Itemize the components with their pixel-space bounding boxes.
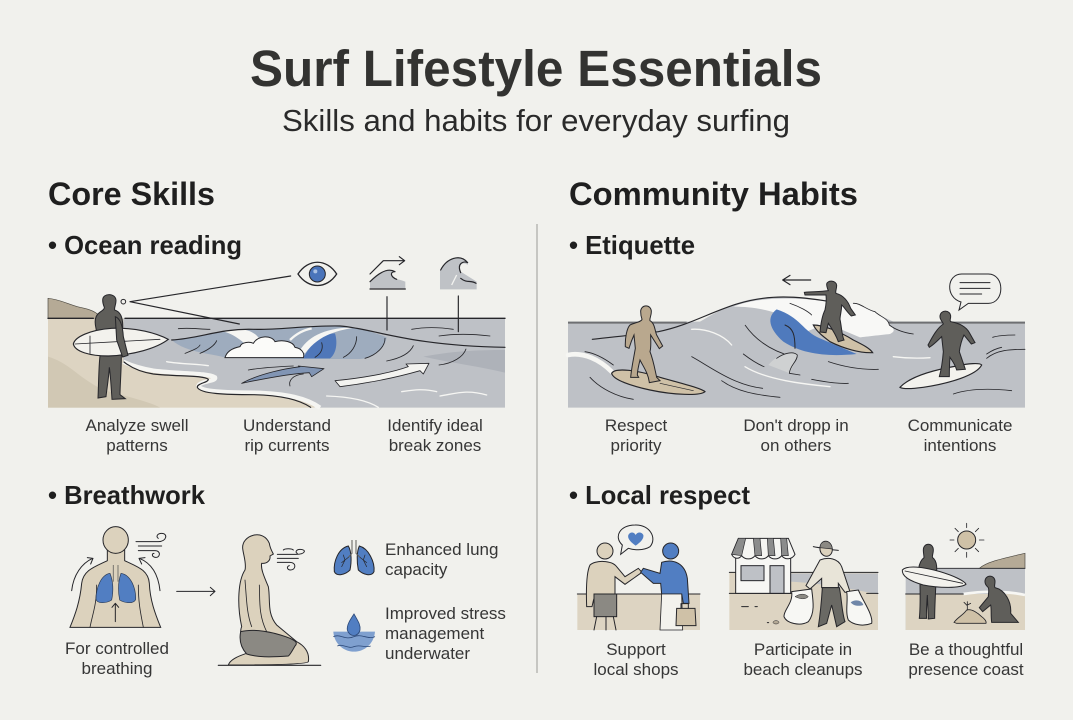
heading: ocean reading: • Ocean reading <box>48 230 242 260</box>
beach <box>48 318 315 408</box>
standing surfer <box>918 544 937 619</box>
water highlights <box>167 362 487 407</box>
surfer with board <box>73 295 168 399</box>
crest line <box>172 326 505 347</box>
scene: local shops <box>577 525 700 630</box>
sea <box>568 297 1025 408</box>
water strokes <box>585 303 1025 399</box>
crest line <box>592 297 830 339</box>
heart bubble <box>618 525 653 554</box>
surfer 3: communicating <box>900 311 982 389</box>
torso with lungs <box>70 527 166 627</box>
icon: lungs <box>334 540 374 575</box>
caption: respect priority: Respect <box>605 416 667 435</box>
blue tube <box>770 309 857 355</box>
caption: for controlled breathing: For controlled <box>65 639 169 658</box>
icon: eye <box>298 262 337 285</box>
caption: beach cleanups: beach cleanups <box>743 660 863 679</box>
subtitle: Skills and habits for everyday surfing <box>282 103 790 138</box>
speech bubble <box>950 274 1001 310</box>
caption: don't drop in: on others <box>761 436 831 455</box>
surfer 1: tan <box>612 306 705 394</box>
wave body <box>172 326 387 359</box>
caption: improved stress management: underwater <box>385 644 470 663</box>
rip current arrow white <box>335 363 429 387</box>
curling white <box>224 329 260 350</box>
arrow: progression <box>177 587 215 596</box>
heading: community habits: Community Habits <box>569 176 858 212</box>
caption: enhanced lung capacity: Enhanced lung <box>385 540 498 559</box>
water highlights <box>568 329 930 387</box>
caption: understand rip currents: Understand <box>243 416 331 435</box>
sea <box>123 318 505 408</box>
caption: for controlled breathing: breathing <box>82 659 152 678</box>
surfer 2: dropping in <box>804 281 873 353</box>
panel: local respect illustrations <box>577 523 1025 630</box>
caption: don't drop in: Don't dropp in <box>743 416 849 435</box>
icon: break zone wave <box>440 258 477 289</box>
kneeling person <box>979 576 1018 622</box>
caption: enhanced lung capacity: capacity <box>385 560 448 579</box>
caption: analyze swell patterns: patterns <box>106 436 168 455</box>
sand mound <box>954 610 986 623</box>
sight lines <box>121 299 126 304</box>
rip current arrow blue <box>242 366 324 383</box>
caption: support local shops: Support <box>606 640 666 659</box>
arrow: direction <box>783 275 811 285</box>
heading: etiquette: • Etiquette <box>569 230 695 260</box>
wave foam <box>733 299 894 337</box>
icon: water drop <box>333 614 375 652</box>
heading: core skills: Core Skills <box>48 176 215 212</box>
caption: thoughtful presence: Be a thoughtful <box>909 640 1023 659</box>
foam cloud <box>225 337 304 358</box>
caption: support local shops: local shops <box>593 660 679 679</box>
panel: ocean reading illustration <box>48 257 505 408</box>
sun <box>958 531 976 549</box>
headland <box>48 298 102 318</box>
horizon <box>125 316 505 320</box>
right person <box>663 543 679 559</box>
heading: local respect: • Local respect <box>569 480 750 510</box>
caption: improved stress management: management <box>385 624 485 643</box>
panel: etiquette illustration <box>568 274 1025 408</box>
caption: identify ideal break zones: Identify ideal <box>387 416 483 435</box>
scene: thoughtful presence <box>902 523 1025 630</box>
title: Surf Lifestyle Essentials <box>250 40 822 97</box>
caption: communicate intentions: Communicate <box>908 416 1012 435</box>
caption: understand rip currents: rip currents <box>244 436 330 455</box>
heading: breathwork: • Breathwork <box>48 480 206 510</box>
caption: communicate intentions: intentions <box>924 436 996 455</box>
small fin wave <box>768 352 797 373</box>
left person <box>597 543 613 559</box>
icon: swell direction <box>370 257 405 289</box>
caption: improved stress management: Improved stress <box>385 604 506 623</box>
shoreline foam <box>123 362 320 408</box>
caption: analyze swell patterns: Analyze swell <box>86 416 188 435</box>
caption: thoughtful presence: presence coast <box>908 660 1024 679</box>
caption: identify ideal break zones: break zones <box>389 436 481 455</box>
caption: beach cleanups: Participate in <box>754 640 852 659</box>
scene: beach cleanup <box>729 538 878 630</box>
seated figure <box>218 535 321 665</box>
caption: respect priority: priority <box>610 436 662 455</box>
wave ripple strokes <box>178 328 490 365</box>
panel: breathwork illustration <box>70 527 375 665</box>
